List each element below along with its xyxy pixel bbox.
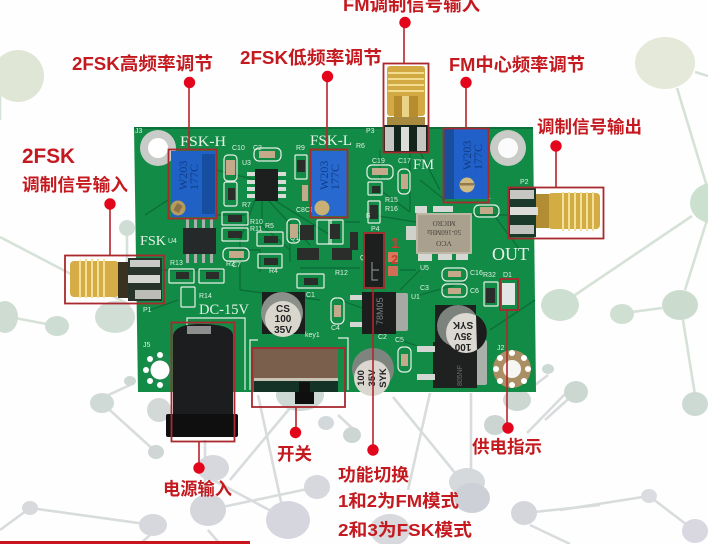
silkscreen labels: P3 <box>366 128 375 135</box>
trimmer: FM center: 177C <box>471 144 485 170</box>
callout: FSK-H high frequency adjust: 2FSK高频率调节 <box>72 53 213 74</box>
trimmer: FSK-H: 177C <box>187 164 201 190</box>
capacitor 100 35V SYK left: SYK <box>378 368 389 388</box>
trimmer: FSK-L: 177C <box>328 164 342 190</box>
silkscreen labels: C2 <box>378 334 387 341</box>
silkscreen labels: D1 <box>503 272 512 279</box>
DC power jack <box>166 324 238 437</box>
silkscreen labels: R7 <box>242 202 251 209</box>
SMA connector: FM input <box>384 66 428 152</box>
silkscreen labels: key1 <box>305 332 320 339</box>
trimmer: FM center <box>444 129 488 199</box>
silkscreen labels: FSK-L <box>310 133 352 149</box>
callout: switch <box>252 348 345 464</box>
silkscreen labels: C2 <box>253 145 262 152</box>
bottom red bar <box>0 541 250 544</box>
callout: function switch: 2和3为FSK模式 <box>338 520 473 540</box>
IC U3 <box>247 169 286 201</box>
callout: power indicator <box>472 279 542 457</box>
callout: power indicator: 供电指示 <box>472 437 542 457</box>
silkscreen labels: P1 <box>143 307 152 314</box>
trimmer: FSK-L: W203 <box>317 161 331 190</box>
silkscreen labels: P2 <box>520 179 529 186</box>
silkscreen labels: Q2 <box>360 255 369 262</box>
capacitor 100 35V SYK right: 100 <box>454 341 471 352</box>
regulator U1 <box>350 292 408 334</box>
callout: function switch <box>338 233 473 540</box>
trimmer: FSK-H <box>170 151 215 217</box>
trimmer: FSK-L <box>312 151 347 216</box>
capacitor 100 35V SYK right <box>435 305 487 353</box>
silkscreen labels: R4 <box>269 268 278 275</box>
silkscreen labels: R2 <box>366 213 375 220</box>
regulator U1: 78M05 <box>375 297 385 325</box>
silkscreen labels: C4 <box>331 325 340 332</box>
callout: function switch: 1和2为FM模式 <box>338 491 460 511</box>
silkscreen labels: R17 <box>451 193 464 200</box>
silkscreen labels: C19 <box>372 158 385 165</box>
silkscreen labels: R9 <box>296 145 305 152</box>
silkscreen labels: C16 <box>470 270 483 277</box>
callout: function switch: 功能切换 <box>338 465 410 485</box>
silkscreen labels: C1 <box>306 292 315 299</box>
SMA connector: modulated output <box>509 188 600 237</box>
jumper P4: 2 <box>391 252 398 267</box>
silkscreen labels: R5 <box>265 223 274 230</box>
callout: 2FSK modulation signal input: 调制信号输入 <box>22 175 129 195</box>
silkscreen labels <box>135 128 529 352</box>
silkscreen labels: R6 <box>356 143 365 150</box>
silkscreen labels: R32 <box>483 272 496 279</box>
capacitor 100 35V SYK right: 35V <box>454 330 472 341</box>
VCO module: VCO <box>436 239 452 248</box>
VCO module: 50-160MHz <box>427 228 461 236</box>
silkscreen labels: C6 <box>470 288 479 295</box>
callout: FSK-L low frequency adjust <box>240 48 382 218</box>
silkscreen labels: R13 <box>170 260 183 267</box>
callout: 2FSK modulation signal input <box>22 145 164 304</box>
silkscreen labels: FSK <box>140 234 166 249</box>
silkscreen labels: J3 <box>135 128 142 135</box>
VCO module <box>406 206 472 261</box>
silkscreen labels: C3 <box>420 285 429 292</box>
capacitor CS 100 35V: 100 <box>275 314 292 325</box>
callout: FM center frequency adjust: FM中心频率调节 <box>449 55 585 75</box>
silkscreen labels: R12 <box>335 270 348 277</box>
silkscreen labels: C7 <box>232 262 241 269</box>
silkscreen labels: OUT <box>492 244 529 264</box>
silkscreen labels: R15 <box>385 197 398 204</box>
silkscreen labels: FM <box>413 157 434 173</box>
slide switch <box>254 348 338 404</box>
callout: 2FSK modulation signal input: 2FSK <box>22 145 75 168</box>
silkscreen labels: J5 <box>143 342 150 349</box>
capacitor 100 35V SYK right: SYK <box>452 319 473 330</box>
silkscreen labels: U1 <box>411 294 420 301</box>
silkscreen labels: R10 <box>250 219 263 226</box>
regulator lower right: 805NF <box>457 365 464 386</box>
silkscreen labels: U5 <box>420 265 429 272</box>
copper traces <box>145 150 535 352</box>
silkscreen labels: R3 <box>226 261 235 268</box>
silkscreen labels: P4 <box>371 226 380 233</box>
silkscreen labels: R14 <box>199 293 212 300</box>
silkscreen labels: R16 <box>385 206 398 213</box>
silkscreen labels: U3 <box>242 160 251 167</box>
green circuit board <box>70 66 600 437</box>
jumper P4: 1 <box>391 235 399 252</box>
callout: power input: 电源输入 <box>163 479 232 499</box>
silkscreen labels: Q1 <box>290 235 299 242</box>
callout: modulated signal output <box>508 117 642 238</box>
capacitor 100 35V SYK left: 100 <box>356 370 367 386</box>
capacitor 100 35V SYK left: 35V <box>367 369 378 386</box>
callout: FM center frequency adjust <box>444 55 585 202</box>
silkscreen labels: C8 <box>296 207 305 214</box>
silkscreen labels: C18 <box>305 207 318 214</box>
callout: FSK-H high frequency adjust <box>72 53 216 218</box>
mounting holes <box>140 130 531 388</box>
callout: FM modulation signal input <box>343 0 480 152</box>
IC U4 <box>183 219 216 263</box>
trimmer: FSK-H: W203 <box>176 161 190 190</box>
callout: switch: 开关 <box>277 444 312 464</box>
jumper P4 <box>365 234 399 287</box>
capacitor 100 35V SYK left <box>352 348 394 396</box>
trimmer: FM center: W203 <box>460 141 474 170</box>
callout: FSK-L low frequency adjust: 2FSK低频率调节 <box>240 48 382 68</box>
silkscreen labels: U4 <box>168 238 177 245</box>
silkscreen labels: C1 <box>482 194 491 201</box>
silkscreen labels: C5 <box>395 337 404 344</box>
silkscreen labels: DC-15V <box>199 302 250 318</box>
capacitor CS 100 35V: 35V <box>274 325 292 336</box>
VCO module: MICRO <box>433 219 455 227</box>
silkscreen labels: FSK-H <box>180 134 227 150</box>
silkscreen outlines for jack and switch <box>187 318 348 390</box>
silkscreen labels: C17 <box>398 158 411 165</box>
SMA connector: 2FSK input <box>70 258 162 301</box>
regulator lower right <box>417 340 487 388</box>
silkscreen labels: C10 <box>232 145 245 152</box>
capacitor CS 100 35V <box>261 292 305 337</box>
SMD passive components <box>169 148 515 372</box>
callout: modulated signal output: 调制信号输出 <box>537 117 642 137</box>
capacitor CS 100 35V: CS <box>276 304 290 315</box>
callout: power input <box>163 322 234 499</box>
silkscreen labels: J2 <box>497 345 504 352</box>
silkscreen labels: R11 <box>250 226 262 233</box>
